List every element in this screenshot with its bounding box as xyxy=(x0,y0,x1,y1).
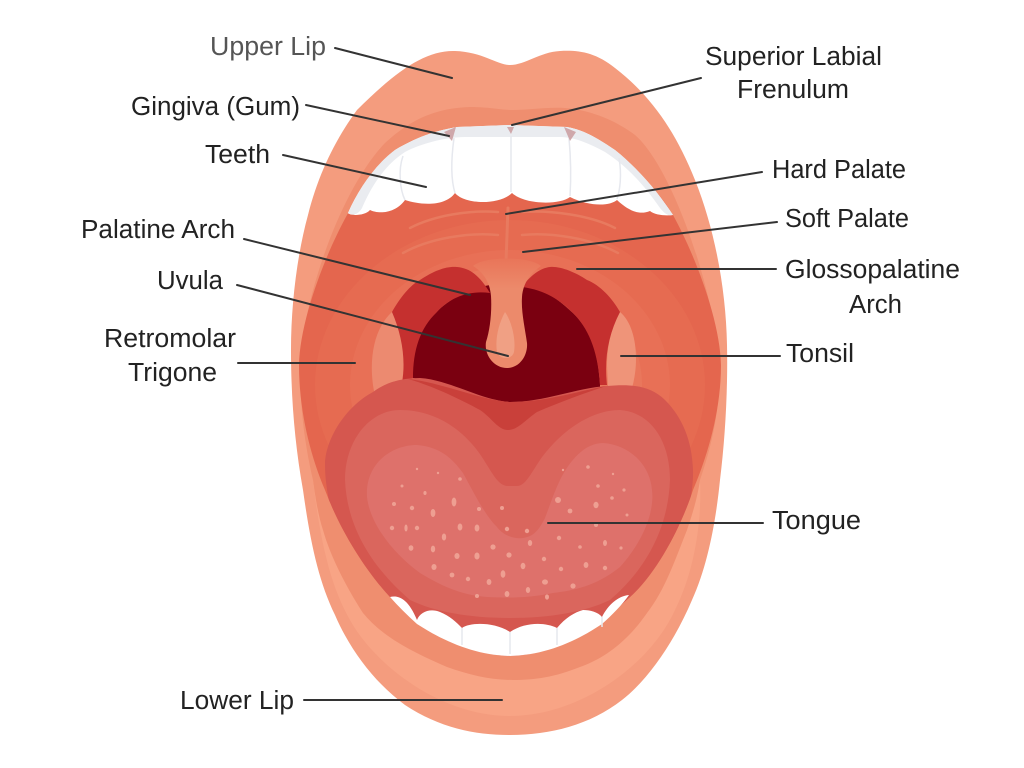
uvula leader xyxy=(237,285,508,356)
teeth separators xyxy=(400,136,620,200)
label: tongue: Tongue xyxy=(772,507,861,535)
lower teeth separators xyxy=(462,617,602,654)
label: uvula: Uvula xyxy=(157,267,224,295)
label: lower lip: Lower Lip xyxy=(180,687,294,715)
throat xyxy=(413,285,600,402)
palatine arch left xyxy=(392,267,490,383)
label: teeth: Teeth xyxy=(205,141,270,169)
label: soft palate: Soft Palate xyxy=(785,205,909,233)
lip inner band xyxy=(300,107,720,680)
hard palate leader xyxy=(506,172,762,214)
teeth grey shading xyxy=(348,125,673,215)
uvula xyxy=(473,258,541,368)
lower lip highlight xyxy=(313,480,700,716)
label: retromolar trigone: Retromolar xyxy=(104,325,237,353)
tongue leader xyxy=(548,522,763,524)
teeth white mass xyxy=(348,125,673,215)
mouth anatomy diagram xyxy=(83,36,959,735)
label: glossopalatine arch: Glossopalatine xyxy=(785,256,960,284)
superior labial frenulum leader xyxy=(512,78,701,125)
tongue groove xyxy=(408,379,606,430)
tonsil left xyxy=(372,312,404,396)
lower lip leader xyxy=(304,699,502,701)
palatine arch leader xyxy=(244,239,470,295)
tongue base xyxy=(325,378,693,660)
teeth leader xyxy=(283,155,426,187)
gum tips xyxy=(444,127,576,141)
tonsil right xyxy=(607,312,636,388)
tongue inner layer xyxy=(367,443,652,598)
gingiva leader xyxy=(306,105,449,136)
label: upper lip: Upper Lip xyxy=(210,33,326,61)
retromolar trigone leader xyxy=(238,362,355,364)
label: retromolar trigone xyxy=(104,325,237,387)
upper lip leader xyxy=(335,48,452,78)
mouth interior xyxy=(299,128,721,656)
upper teeth xyxy=(348,125,673,215)
tongue middle layer xyxy=(345,410,670,618)
tongue papillae xyxy=(390,465,628,600)
label: superior labial frenulum: Superior Labial xyxy=(705,43,882,71)
lips xyxy=(291,51,727,735)
label: retromolar trigone: Trigone xyxy=(128,359,217,387)
lower teeth mass xyxy=(390,595,629,656)
outer lip xyxy=(291,51,727,735)
soft palate leader xyxy=(523,222,777,252)
palate soft shading xyxy=(350,250,670,407)
label: tonsil: Tonsil xyxy=(786,340,854,368)
label: superior labial frenulum xyxy=(705,43,882,104)
tongue xyxy=(325,378,693,660)
palatine arch right xyxy=(522,267,620,385)
palate ridges xyxy=(403,208,618,262)
label: gingiva: Gingiva (Gum) xyxy=(131,93,300,121)
lower teeth xyxy=(390,595,629,656)
label: superior labial frenulum: Frenulum xyxy=(737,76,849,104)
tonsil leader xyxy=(621,355,780,357)
label: glossopalatine arch xyxy=(785,256,960,319)
label: glossopalatine arch: Arch xyxy=(849,291,902,319)
glossopalatine arch leader xyxy=(577,268,776,270)
label: palatine arch: Palatine Arch xyxy=(81,216,235,244)
label: hard palate: Hard Palate xyxy=(772,156,906,184)
leader lines xyxy=(237,48,780,700)
